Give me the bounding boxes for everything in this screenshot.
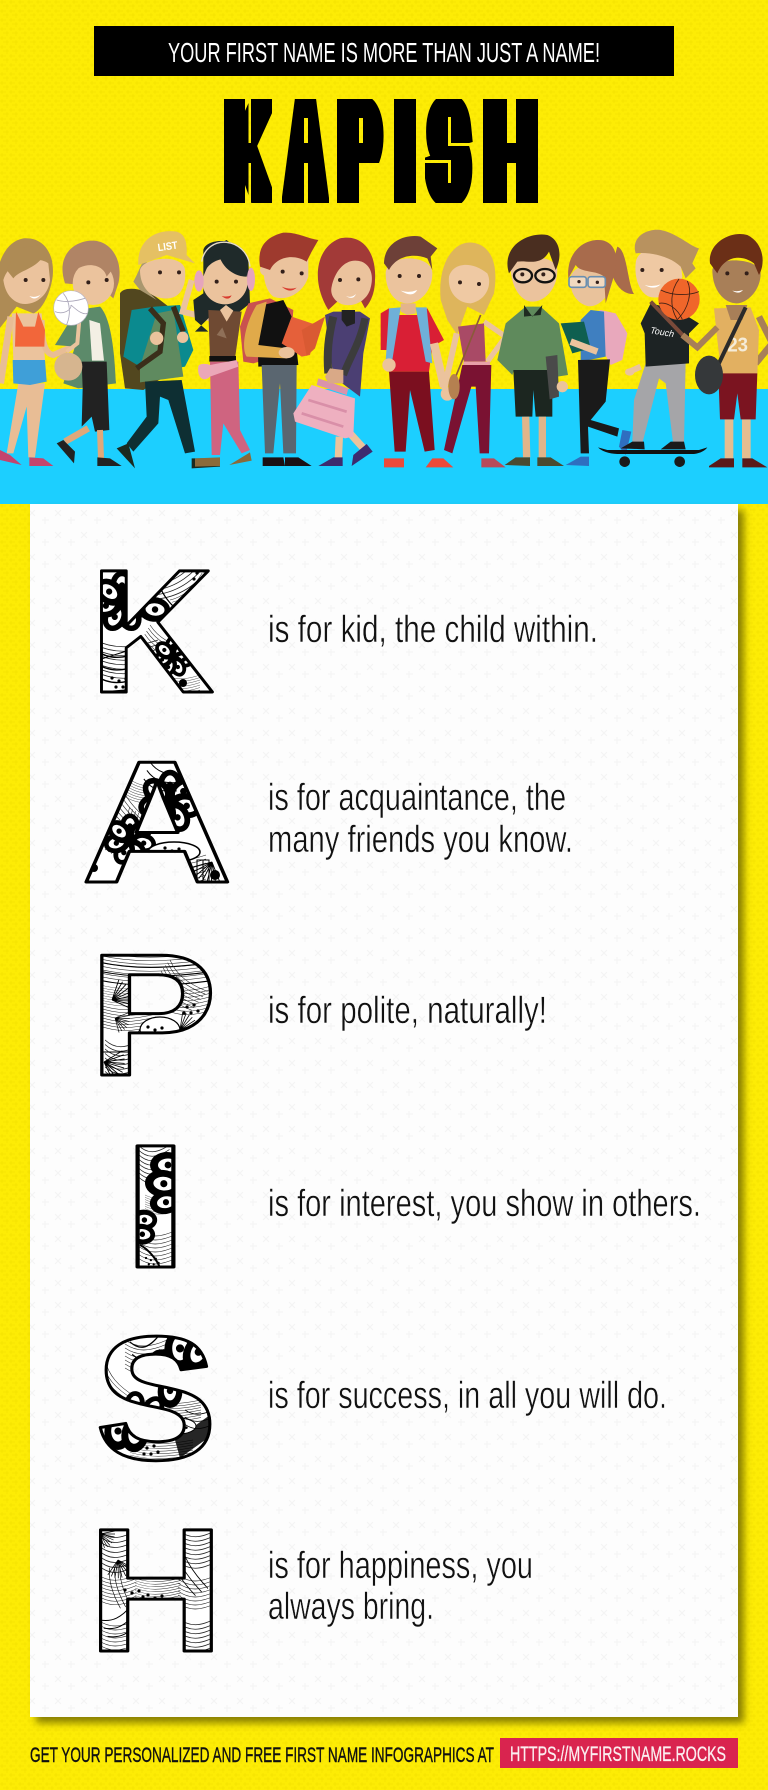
basketball — [658, 279, 700, 320]
person 5: boy reading a book — [240, 233, 325, 466]
person 1: girl in orange top — [0, 238, 78, 466]
illustration: group of young people, left half — [0, 231, 375, 468]
person 4: girl with pink headphones — [183, 240, 255, 467]
text: P meaning: is for polite, naturally! — [268, 990, 547, 1032]
footer url badge — [500, 1738, 738, 1768]
person 6: girl with pink handbag — [293, 238, 375, 466]
row H — [88, 1493, 533, 1689]
text: A meaning: is for acquaintance, the — [268, 777, 566, 819]
person 12: boy in tank top with shoulder bag — [682, 234, 768, 467]
person 8: blonde girl — [440, 242, 506, 467]
mandala letter H: H — [88, 1493, 224, 1689]
person 12: boy in tank top with shoulder bag: 23 — [727, 335, 748, 357]
footer call to action: GET YOUR PERSONALIZED AND FREE FIRST NAME INFOGRAPHICS AT — [30, 1744, 494, 1767]
volleyball — [54, 291, 88, 325]
title: KAPISH: A — [290, 84, 321, 217]
person 3: hiker boy with backpack and cap — [117, 231, 220, 468]
illustration: group of young people, right half — [381, 230, 768, 467]
row P — [89, 917, 547, 1112]
row A — [81, 724, 573, 919]
person 9: boy with glasses and folder — [497, 235, 568, 466]
person 2: girl with volleyball — [54, 241, 122, 466]
text: A meaning — [268, 777, 573, 861]
title: KAPISH: I — [397, 84, 413, 218]
text: A meaning: many friends you know. — [268, 819, 573, 861]
mandala letter P: P — [89, 917, 217, 1112]
person 10: girl with tablet and pink backpack — [561, 240, 634, 466]
text: H meaning: always bring. — [268, 1586, 434, 1628]
row S — [95, 1301, 667, 1497]
mandala letter K: K — [90, 534, 214, 730]
white content panel — [30, 504, 738, 1717]
mandala letter S: S — [95, 1301, 217, 1497]
text: H meaning — [268, 1545, 533, 1628]
person 11: skater with basketball: Touch — [650, 325, 675, 339]
row K — [90, 534, 598, 730]
title: KAPISH — [224, 99, 538, 203]
headline banner — [94, 26, 674, 76]
row I — [121, 1109, 701, 1305]
title: KAPISH: K — [227, 85, 266, 218]
text: K meaning: is for kid, the child within. — [268, 609, 598, 651]
person 7: boy in red shirt — [381, 236, 453, 467]
person 3: hiker boy with backpack and cap: LIST — [157, 239, 179, 254]
title: KAPISH: P — [340, 85, 378, 217]
person 11: skater with basketball — [598, 230, 707, 467]
mandala letter I: I — [121, 1109, 190, 1305]
title: KAPISH: S — [430, 85, 467, 218]
text: H meaning: is for happiness, you — [268, 1545, 533, 1587]
blue floor band — [0, 389, 768, 504]
mandala letter A: A — [81, 724, 233, 919]
title: KAPISH: H — [487, 86, 534, 218]
